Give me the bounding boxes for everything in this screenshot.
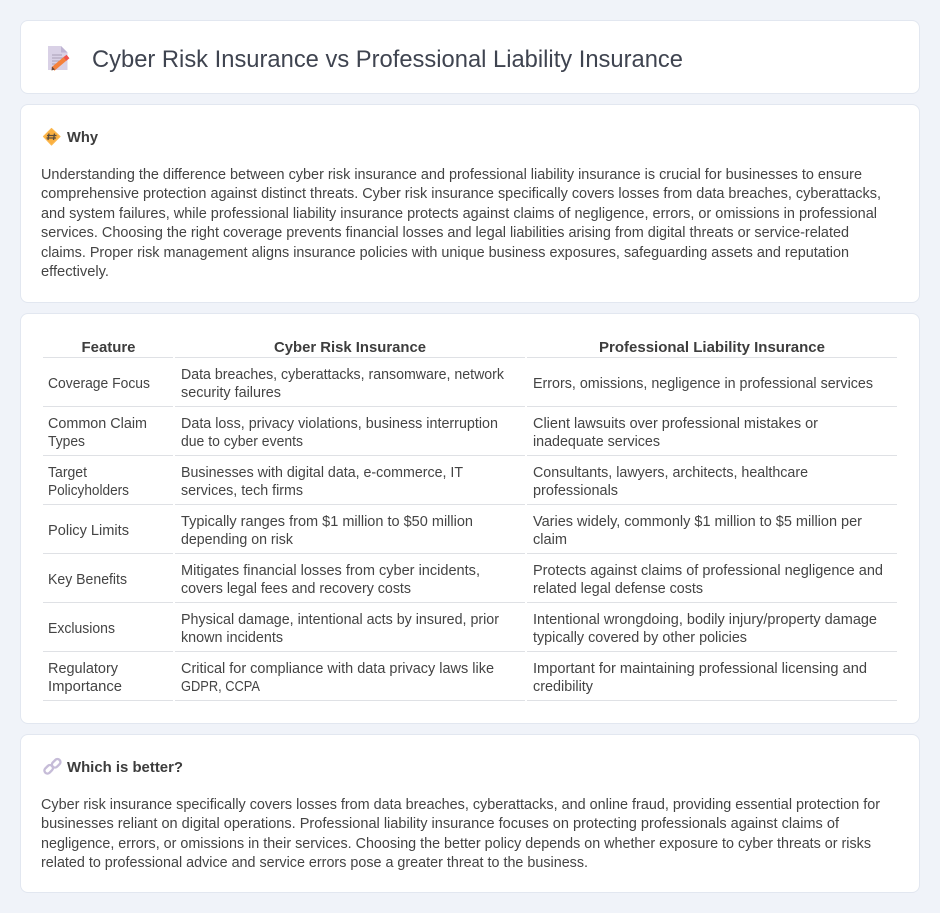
icon: document with pencil [48, 46, 68, 70]
row: common claim types: Client lawsuits over professional mistakes or [533, 416, 818, 432]
row: exclusions: Physical damage, intentional acts by insured, prior [181, 612, 499, 628]
title: Cyber Risk Insurance vs Professional Liability Insurance [92, 46, 683, 73]
row: policy limits: depending on risk [181, 532, 294, 548]
row: target policyholders: professionals [533, 483, 618, 499]
table header: Cyber Risk Insurance [274, 339, 426, 356]
row: target policyholders: Businesses with digital data, e-commerce, IT [181, 465, 463, 481]
icon: warning diamond [44, 128, 60, 145]
row: regulatory importance: Critical for compliance with data privacy laws like [181, 661, 494, 677]
row: target policyholders: services, tech firms [181, 483, 303, 499]
text block: why paragraph: and system failures, while professional liability insurance protects against claims of negligence, errors, or omissions in professional [41, 206, 877, 222]
row: exclusions [43, 612, 897, 652]
panel: which is better [20, 734, 920, 893]
row: exclusions: known incidents [181, 630, 283, 646]
row: coverage focus: Errors, omissions, negligence in professional services [533, 376, 873, 392]
row: policy limits: Varies widely, commonly $1 million to $5 million per [533, 514, 862, 530]
row: key benefits: related legal defense costs [533, 581, 703, 597]
panel: header [20, 20, 920, 94]
row: exclusions: typically covered by other policies [533, 630, 747, 646]
text block: which is better paragraph: Cyber risk insurance specifically covers losses from data breaches, cyberattacks, and online fraud, providing essential protection for [41, 797, 880, 813]
row: key benefits: Key Benefits [48, 572, 127, 588]
row: policy limits: claim [533, 532, 567, 548]
row: target policyholders: Target [48, 465, 87, 481]
row: exclusions: Intentional wrongdoing, bodily injury/property damage [533, 612, 877, 628]
text block: which is better paragraph [41, 797, 880, 871]
row: policy limits: Typically ranges from $1 million to $50 million [181, 514, 473, 530]
text block: why paragraph: services. Choosing the right coverage prevents financial losses and legal liabilities arising from digital threats or service-related [41, 225, 849, 241]
text block: why paragraph [41, 167, 881, 280]
text block: why paragraph: Understanding the difference between cyber risk insurance and professional liability insurance is crucial for businesses to ensure [41, 167, 862, 183]
table header: Feature [82, 339, 136, 356]
row: regulatory importance: GDPR, CCPA [181, 679, 260, 695]
text block: which is better paragraph: businesses reliant on digital operations. Professional liability insurance focuses on protecting professionals against claims of [41, 816, 840, 832]
row: common claim types: inadequate services [533, 434, 660, 450]
panel: comparison table [20, 313, 920, 724]
row: common claim types: Data loss, privacy violations, business interruption [181, 416, 498, 432]
row: policy limits [43, 514, 897, 554]
row: target policyholders [43, 465, 897, 505]
text block: which is better paragraph: related to professional advice and service errors pose a greater threat to the business. [41, 855, 588, 871]
text block: why paragraph: comprehensive protection against distinct threats. Cyber risk insurance specifically covers losses from data breaches, cyberattacks, [41, 186, 881, 202]
row: key benefits: covers legal fees and recovery costs [181, 581, 411, 597]
row: key benefits [43, 563, 897, 603]
row: key benefits: Mitigates financial losses from cyber incidents, [181, 563, 480, 579]
row: coverage focus [43, 367, 897, 407]
row: common claim types: Types [48, 434, 85, 450]
text block: why paragraph: claims. Proper risk management aligns insurance policies with unique business exposures, safeguarding assets and reputation [41, 245, 849, 261]
row: common claim types: due to cyber events [181, 434, 303, 450]
heading: why: Why [67, 129, 99, 146]
table header [43, 339, 897, 358]
row: target policyholders: Consultants, lawyers, architects, healthcare [533, 465, 808, 481]
row: target policyholders: Policyholders [48, 483, 129, 499]
text block: why paragraph: effectively. [41, 264, 109, 280]
row: common claim types: Common Claim [48, 416, 147, 432]
table header: Professional Liability Insurance [599, 339, 825, 356]
row: regulatory importance: Importance [48, 679, 122, 695]
row: regulatory importance: credibility [533, 679, 594, 695]
panel: why [20, 104, 920, 303]
row: regulatory importance: Regulatory [48, 661, 119, 677]
row: key benefits: Protects against claims of professional negligence and [533, 563, 883, 579]
icon: link [43, 758, 62, 775]
row: coverage focus: security failures [181, 385, 281, 401]
row: coverage focus: Data breaches, cyberattacks, ransomware, network [181, 367, 505, 383]
row: common claim types [43, 416, 897, 456]
row: regulatory importance: Important for maintaining professional licensing and [533, 661, 867, 677]
text block: which is better paragraph: negligence, errors, or omissions in their services. Choosing the better policy depends on whether exposure to cyber threats or risks [41, 836, 871, 852]
row: policy limits: Policy Limits [48, 523, 129, 539]
heading: which is better: Which is better? [67, 759, 183, 776]
row: exclusions: Exclusions [48, 621, 115, 637]
row: coverage focus: Coverage Focus [48, 376, 150, 392]
row: regulatory importance [43, 661, 897, 701]
